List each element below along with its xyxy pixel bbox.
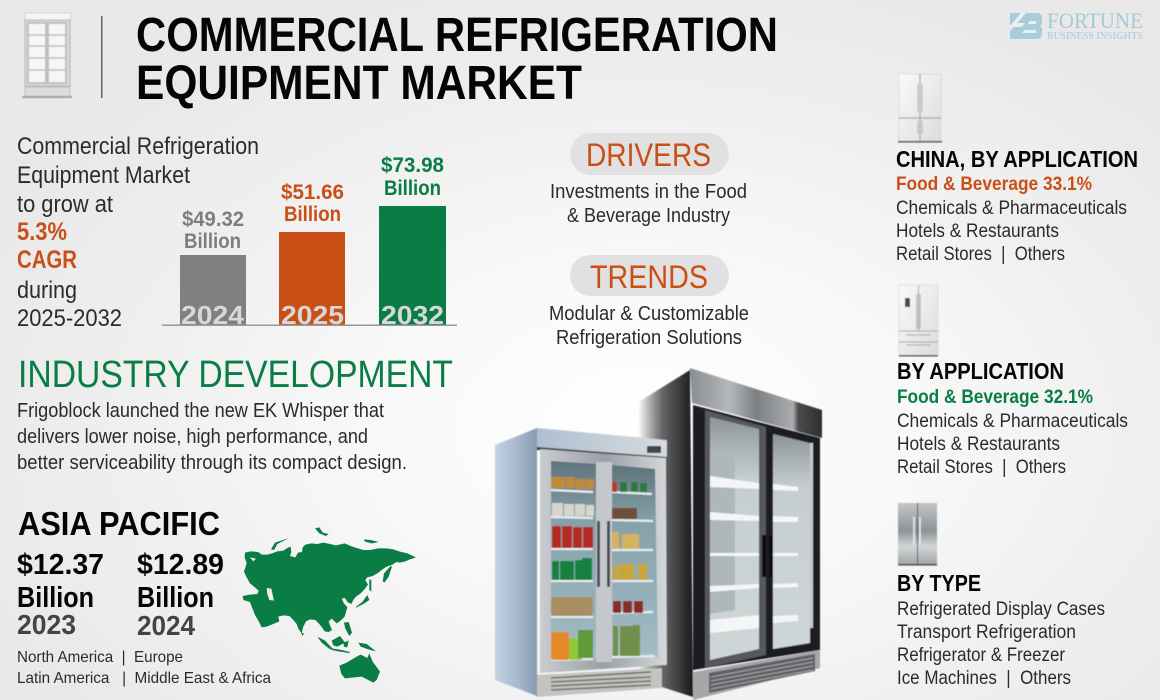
shelves xyxy=(710,476,798,633)
panel: Asia Pacific figures: 2024 xyxy=(137,610,195,641)
text block: market growth: 2025-2032 xyxy=(17,305,122,332)
text block: market growth: Equipment Market xyxy=(17,162,190,189)
panel: by application xyxy=(897,358,1128,478)
heading: industry development: INDUSTRY DEVELOPMENT xyxy=(18,354,453,396)
title: COMMERCIAL REFRIGERATION xyxy=(136,9,778,62)
icon: refrigerator with water dispenser xyxy=(899,285,938,356)
text block: market growth: to grow at xyxy=(17,191,113,218)
bar chart: market size: $73.98 xyxy=(381,154,444,177)
text block: market growth: CAGR xyxy=(17,246,77,274)
panel: by application: Food & Beverage 32.1% xyxy=(897,387,1093,408)
logo: Fortune Business Insights: BUSINESS INSIGHTS xyxy=(1047,31,1143,42)
map: Asia Pacific xyxy=(243,527,416,683)
panel: China by application: Retail Stores | Others xyxy=(896,244,1065,265)
panel: trends: TRENDS xyxy=(590,259,708,295)
text block: industry development: delivers lower noise, high performance, and xyxy=(17,426,368,448)
panel: China by application: Chemicals & Pharmaceuticals xyxy=(896,198,1127,219)
panel: drivers: Investments in the Food xyxy=(550,181,747,203)
text block: market growth xyxy=(17,133,259,332)
text block: industry development xyxy=(17,400,407,474)
panel: by type: Refrigerator & Freezer xyxy=(897,645,1066,666)
text block: market growth: during xyxy=(17,277,77,304)
panel: drivers: & Beverage Industry xyxy=(567,205,730,227)
bar chart: market size: 2025 xyxy=(281,300,344,330)
icon: side by side steel refrigerator xyxy=(898,503,937,566)
panel: by type: BY TYPE xyxy=(897,570,981,596)
logo: Fortune Business Insights: FORTUNE xyxy=(1047,8,1143,33)
logo: Fortune Business Insights xyxy=(1010,8,1143,42)
illustration: stocked display refrigerator xyxy=(495,428,667,697)
panel: by application: Hotels & Restaurants xyxy=(897,434,1060,455)
panel: China by application: Hotels & Restaurants xyxy=(896,221,1059,242)
panel: China by application: Food & Beverage 33.1% xyxy=(896,174,1092,195)
text block: market growth: Commercial Refrigeration xyxy=(17,133,259,160)
panel: drivers xyxy=(550,133,747,227)
bar chart: market size: 2024 xyxy=(181,300,245,330)
panel: China by application xyxy=(896,146,1138,265)
bar chart: market size: Billion xyxy=(284,203,341,226)
panel: Asia Pacific figures: North America | Europe xyxy=(17,649,183,666)
text block: industry development: better serviceability through its compact design. xyxy=(17,452,407,474)
panel: drivers: DRIVERS xyxy=(586,137,711,173)
text block: industry development: Frigoblock launched the new EK Whisper that xyxy=(17,400,384,422)
panel: by type: Transport Refrigeration xyxy=(897,622,1076,643)
bar chart: market size xyxy=(162,154,457,330)
panel: by type: Refrigerated Display Cases xyxy=(897,599,1105,620)
panel: Asia Pacific figures: Billion xyxy=(17,582,94,614)
panel: Asia Pacific figures: Latin America | Middle East & Africa xyxy=(17,670,271,687)
bar chart: market size: Billion xyxy=(184,230,241,253)
panel: Asia Pacific figures xyxy=(17,505,271,687)
shelves xyxy=(551,490,655,660)
panel: by application: Chemicals & Pharmaceuticals xyxy=(897,411,1128,432)
panel: trends xyxy=(549,255,749,349)
panel: by application: Retail Stores | Others xyxy=(897,457,1066,478)
bar chart: market size: $51.66 xyxy=(281,181,344,204)
illustration: empty black glass door refrigerator xyxy=(637,368,822,700)
panel: by type xyxy=(897,570,1105,689)
panel: by type: Ice Machines | Others xyxy=(897,668,1071,689)
panel: trends: Modular & Customizable xyxy=(549,303,749,325)
panel: Asia Pacific figures: $12.89 xyxy=(137,549,224,581)
title xyxy=(136,9,778,110)
panel: trends: Refrigeration Solutions xyxy=(556,327,742,349)
icon: glass door display fridge xyxy=(22,13,72,98)
title: EQUIPMENT MARKET xyxy=(136,57,582,110)
bar chart: market size: 2032 xyxy=(381,300,444,330)
panel: Asia Pacific figures: 2023 xyxy=(17,609,76,640)
panel: Asia Pacific figures: $12.37 xyxy=(17,549,104,581)
bar chart: market size: $49.32 xyxy=(182,208,244,231)
panel: Asia Pacific figures: Billion xyxy=(137,582,214,614)
icon: french door refrigerator xyxy=(898,74,942,142)
text block: market growth: 5.3% xyxy=(17,218,67,246)
header divider xyxy=(101,16,102,98)
panel: Asia Pacific figures: ASIA PACIFIC xyxy=(18,505,220,542)
panel: by application: BY APPLICATION xyxy=(897,358,1064,384)
bar chart: market size: Billion xyxy=(384,177,441,200)
